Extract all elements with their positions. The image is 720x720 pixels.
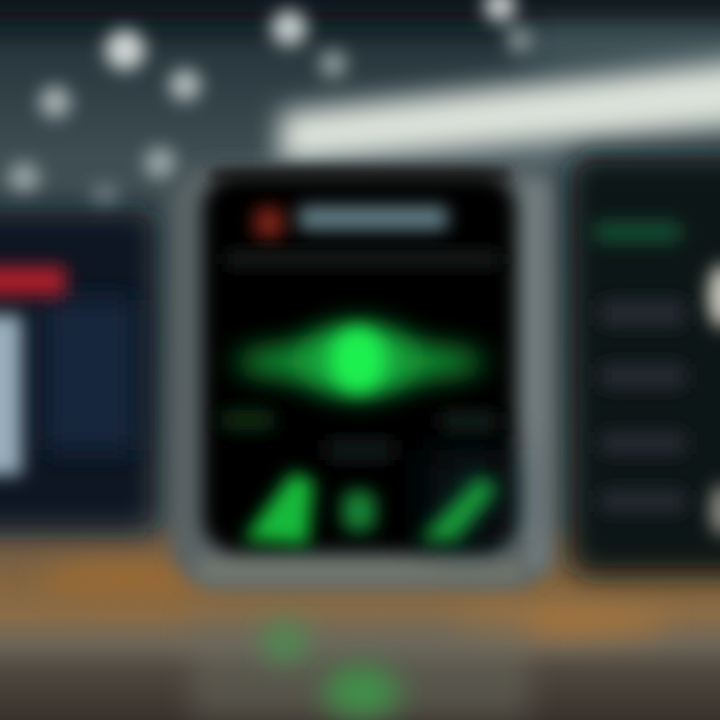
bright light strip <box>280 58 720 165</box>
watch screen <box>203 176 515 552</box>
left device panel <box>0 210 156 530</box>
watch body <box>172 165 552 587</box>
light blue screen <box>0 315 22 475</box>
ceiling lights <box>8 0 534 212</box>
green reflections <box>263 622 307 662</box>
header title <box>298 206 448 230</box>
right edge highlights <box>708 264 720 328</box>
list rows <box>600 300 685 512</box>
right device panel <box>570 155 720 575</box>
floor and counter <box>0 520 720 720</box>
side readouts <box>222 410 498 460</box>
watch header <box>225 206 500 266</box>
green lower icons <box>243 472 498 545</box>
reflection on counter <box>190 615 530 720</box>
red icon <box>254 207 284 239</box>
green glow chart <box>235 324 485 396</box>
green heading <box>595 222 680 242</box>
red bar <box>0 266 66 296</box>
